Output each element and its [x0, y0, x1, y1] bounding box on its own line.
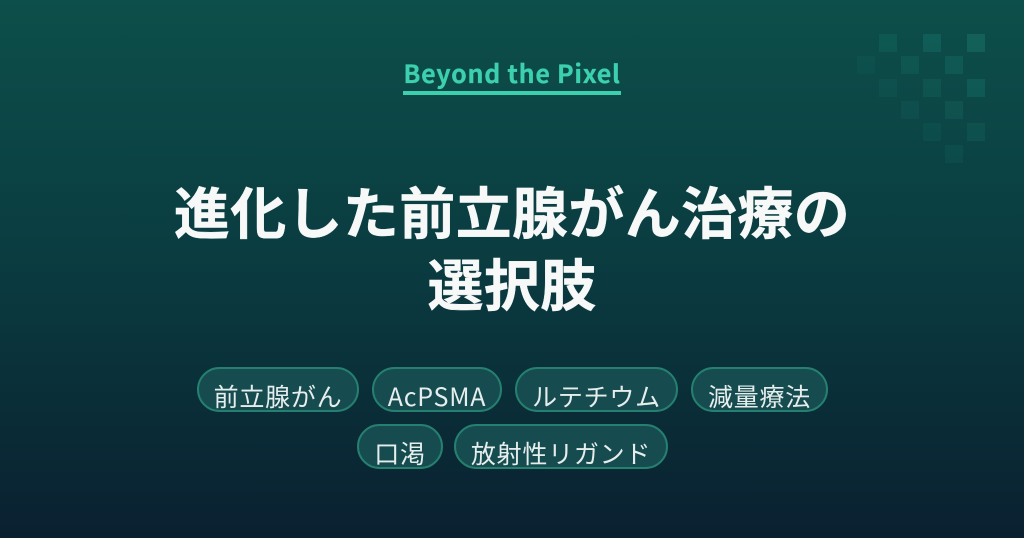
tag: AcPSMA: AcPSMA	[388, 378, 486, 414]
title: 進化した前立腺がん治療の	[174, 170, 850, 251]
tag: 口渇	[357, 424, 443, 469]
tag: 減量療法	[691, 367, 828, 412]
tag: 放射性リガンド: 放射性リガンド	[471, 435, 651, 471]
title: 選択肢	[427, 242, 597, 323]
tag: 放射性リガンド	[454, 424, 668, 469]
tag: AcPSMA	[372, 367, 502, 412]
tag: 前立腺がん: 前立腺がん	[214, 378, 342, 414]
tag: 前立腺がん	[197, 367, 359, 412]
tag: ルテチウム	[515, 367, 678, 412]
tag: 口渇: 口渇	[374, 435, 426, 471]
decorative square pattern	[879, 34, 985, 141]
brand label: Beyond the Pixel: Beyond the Pixel	[403, 55, 621, 91]
title	[174, 170, 850, 323]
tag: ルテチウム: ルテチウム	[532, 378, 661, 414]
tag: 減量療法: 減量療法	[708, 378, 811, 414]
